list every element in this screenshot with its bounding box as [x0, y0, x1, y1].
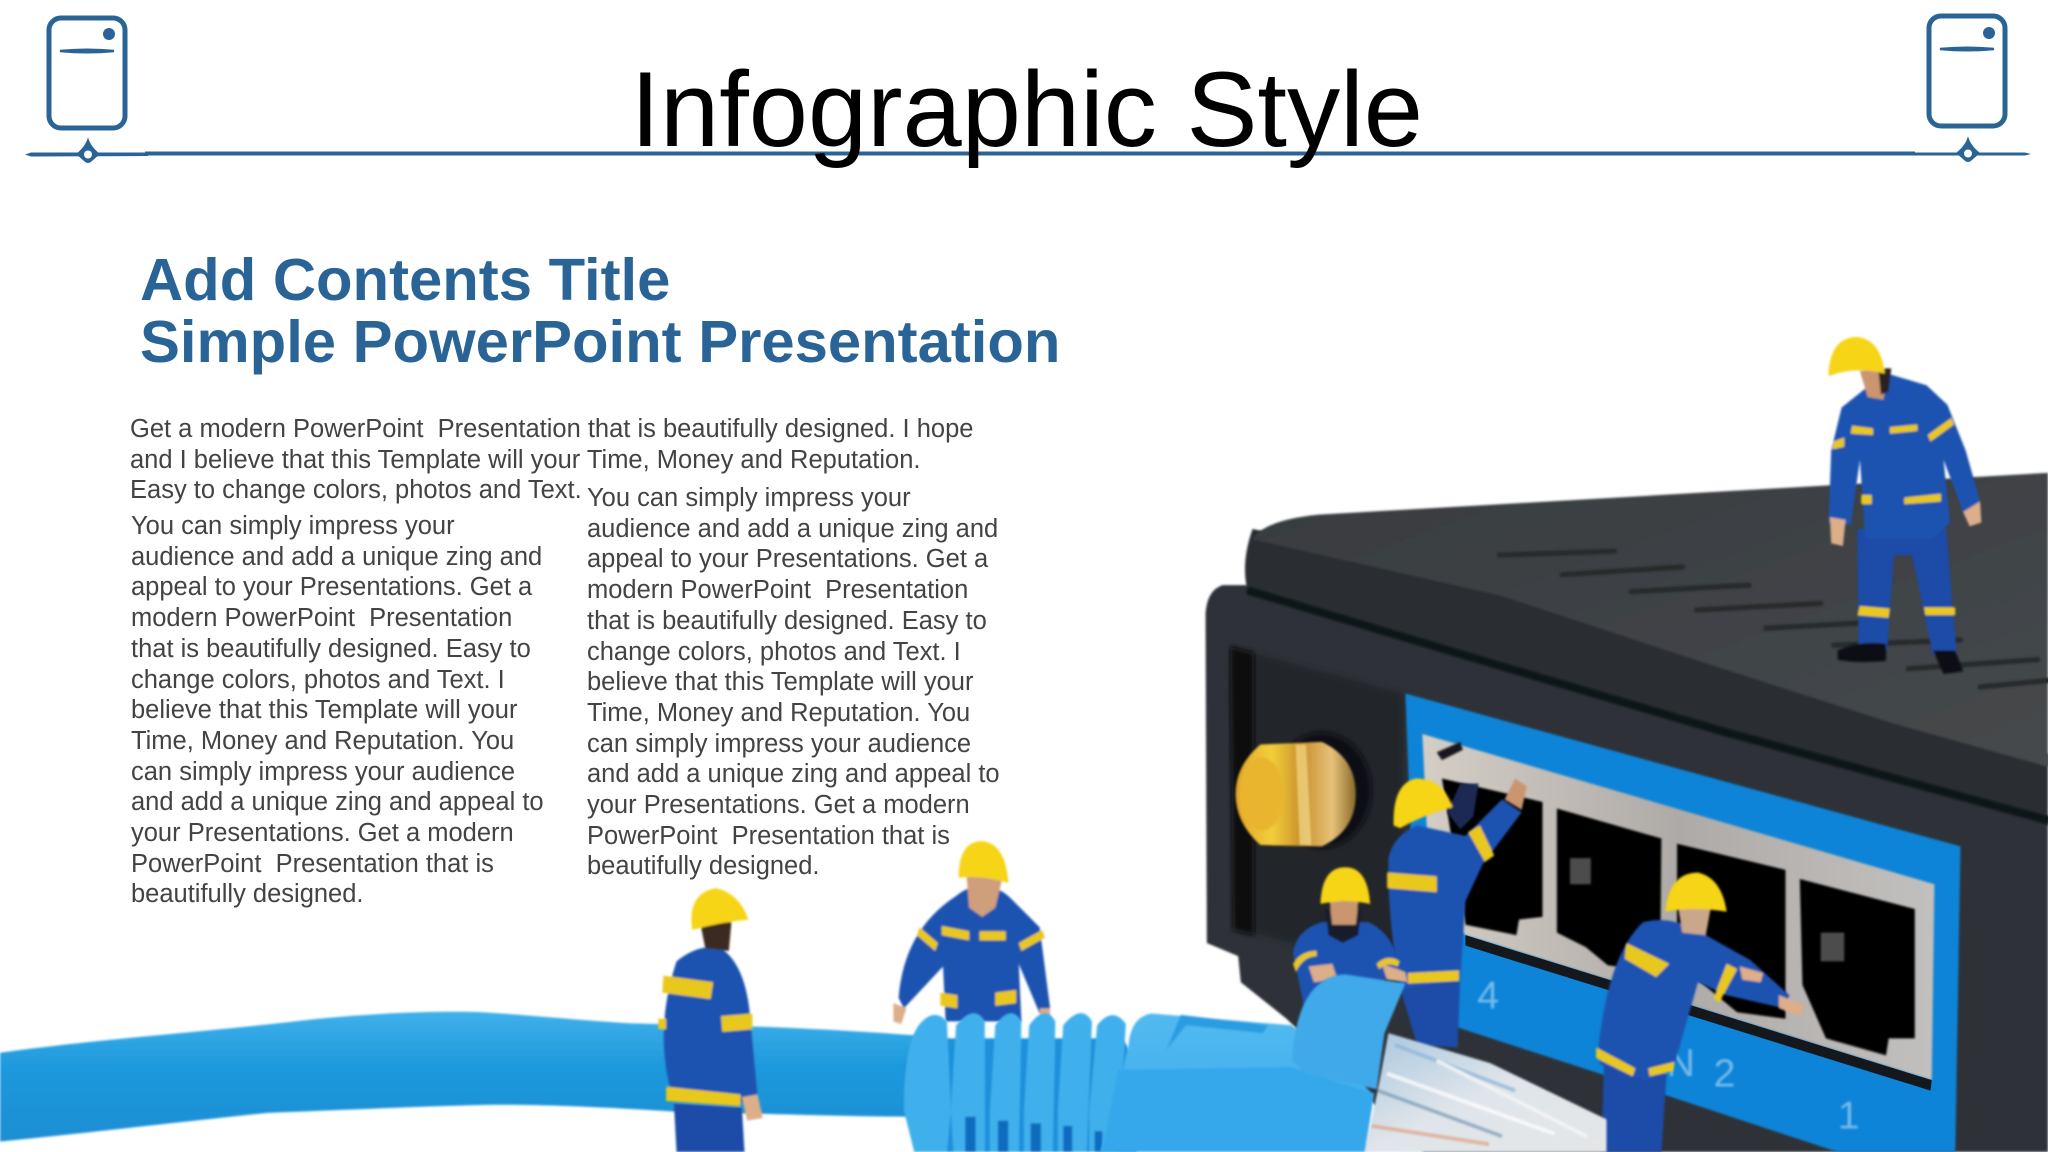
- plug latch recess: [1166, 1015, 1268, 1050]
- worker walking by cable: [658, 888, 763, 1152]
- blue network cable: [0, 1012, 921, 1142]
- text block: right column: You can simply impress your audience and add a unique zing and appeal to your Presentations. Get a modern PowerPoint Presentation that is beautifully designed. Easy to change colors, photos and Text. I believe that this Template will your Time, Money and Reputation. You can simply impress your audience and add a unique zing and appeal to your Presentations. Get a modern PowerPoint Presentation that is beautifully designed.: [587, 484, 1000, 880]
- worker pulling port at right: [1596, 872, 1805, 1152]
- worker bending over plug: [893, 841, 1050, 1027]
- panel numbers: [1477, 974, 1860, 1137]
- plug body: [1100, 1014, 1374, 1152]
- ribbed cable boot: [904, 1013, 1136, 1152]
- worker hammering at port: [1387, 742, 1527, 1048]
- text block: left column: You can simply impress your audience and add a unique zing and appeal to your Presentations. Get a modern PowerPoint Presentation that is beautifully designed. Easy to change colors, photos and Text. I believe that this Template will your Time, Money and Reputation. You can simply impress your audience and add a unique zing and appeal to your Presentations. Get a modern PowerPoint Presentation that is beautifully designed.: [131, 512, 544, 908]
- panel numbers: 2: [1714, 1053, 1735, 1096]
- clear plug tip with wires: [1365, 1033, 1607, 1152]
- RJ45 plug: [1100, 974, 1607, 1152]
- silver port frame: [1422, 734, 1934, 1080]
- panel numbers: 1: [1838, 1094, 1860, 1137]
- panel numbers: 4: [1477, 974, 1499, 1017]
- gold antenna connector: [1236, 733, 1371, 848]
- heading: Add Contents Title Simple PowerPoint Presentation: [140, 246, 1060, 374]
- router top surface: [1253, 473, 2048, 767]
- blue port panel: [1405, 694, 1960, 1152]
- panel numbers: N: [1667, 1042, 1695, 1085]
- router: [1206, 473, 2048, 1152]
- router recess: [1230, 647, 1404, 973]
- router body: [1206, 585, 2048, 1152]
- router lid edge: [1245, 529, 2048, 825]
- icon: left device: [49, 18, 125, 163]
- icon: right device: [1929, 16, 2005, 162]
- text block: intro: Get a modern PowerPoint Presentation that is beautifully designed. I hope and I believe that this Template will your Time, Money and Reputation. Easy to change colors, photos and Text.: [130, 415, 973, 504]
- router vents: [1499, 551, 2048, 687]
- ethernet ports: [1442, 778, 1915, 1055]
- title: Infographic Style: [630, 50, 1423, 168]
- worker crouching behind plug: [1293, 867, 1408, 1016]
- plug clip: [1292, 974, 1405, 1089]
- worker standing on router top: [1829, 337, 1981, 674]
- lid groove: [1247, 590, 2048, 820]
